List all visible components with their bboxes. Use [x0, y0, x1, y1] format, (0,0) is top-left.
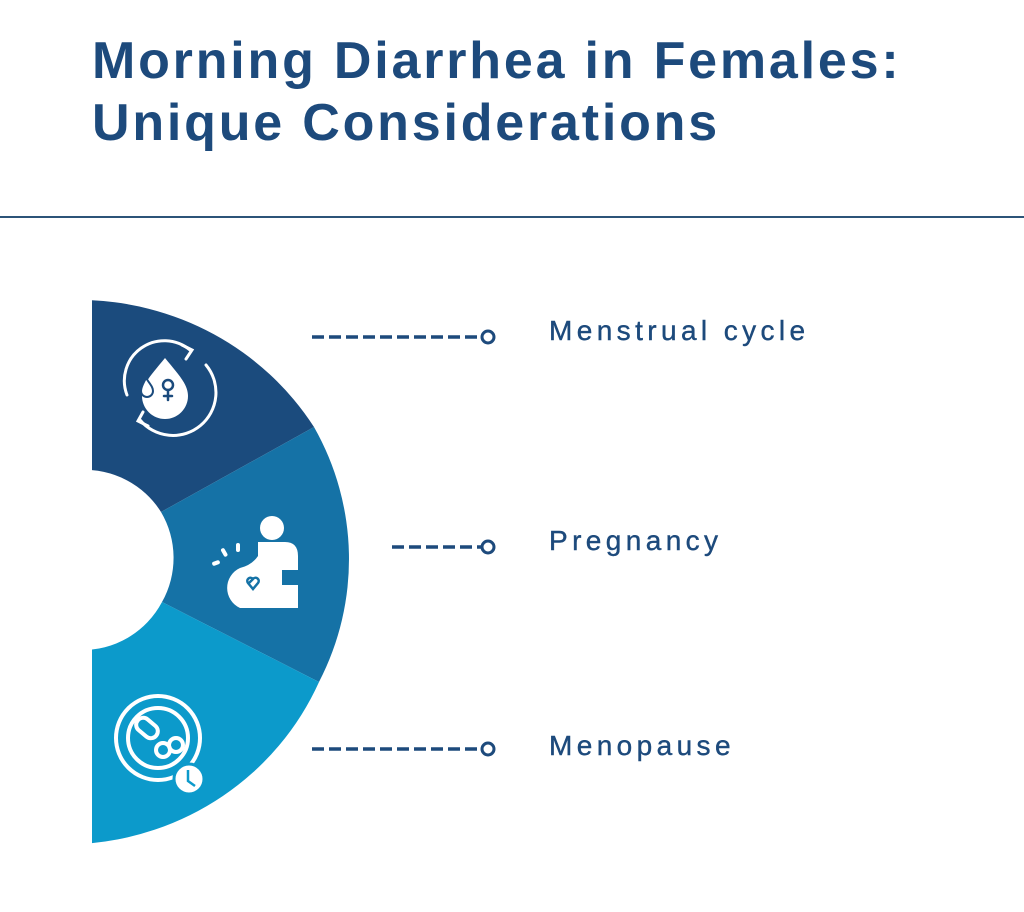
label: menstrual cycle: Menstrual cycle: [549, 315, 810, 346]
title: Unique Considerations: [92, 94, 720, 152]
semicircle diagram: [92, 300, 496, 844]
icon: pregnancy: [212, 516, 298, 608]
connector: menopause: [312, 743, 494, 755]
label: menopause: Menopause: [549, 730, 735, 761]
icon: menstrual cycle: [124, 341, 216, 435]
segment: pregnancy: [161, 427, 349, 682]
label: pregnancy: Pregnancy: [549, 525, 722, 556]
hole: [92, 649, 93, 650]
title: [92, 32, 901, 152]
title: Morning Diarrhea in Females:: [92, 32, 901, 90]
icon: menopause: [116, 696, 204, 794]
connector: pregnancy: [392, 541, 494, 553]
connector: menstrual: [312, 331, 494, 343]
segment: menopause: [80, 602, 319, 844]
segment: menstrual cycle: [80, 300, 314, 512]
